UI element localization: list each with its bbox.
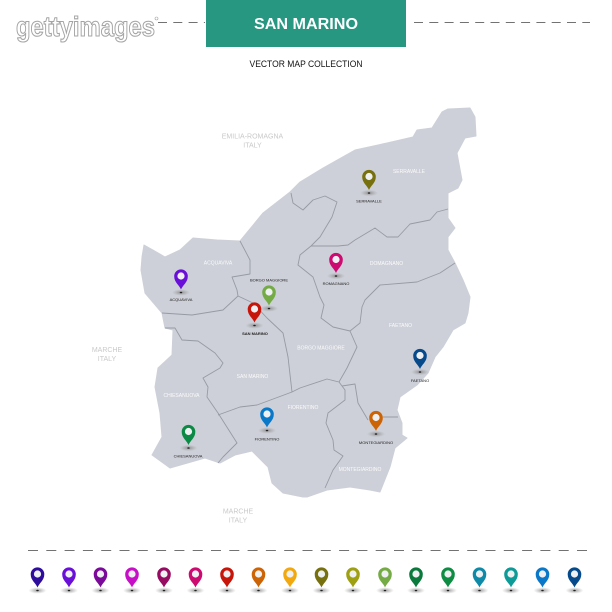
pin labels: ACQUAVIVA — [170, 297, 193, 302]
title banner — [206, 0, 406, 47]
district labels: ACQUAVIVA — [204, 260, 233, 266]
district labels: MONTEGIARDINO — [339, 467, 381, 473]
map outline — [141, 108, 476, 497]
district labels: SERRAVALLE — [393, 169, 426, 175]
pin colour legend row — [28, 567, 584, 594]
pin labels: ROMAGNANO — [323, 281, 349, 286]
pin labels: MONTEGIARDINO — [359, 440, 393, 445]
district labels: CHIESANUOVA — [163, 393, 200, 399]
district labels: DOMAGNANO — [370, 261, 403, 267]
title banner: SAN MARINO — [254, 16, 358, 33]
neighbouring region label: Marche west: MARCHE — [92, 347, 122, 354]
district labels: SAN MARINO — [237, 374, 268, 380]
district labels: FAETANO — [389, 323, 412, 329]
top dashed line left — [158, 22, 205, 24]
watermark: gettyimages — [16, 11, 155, 42]
neighbouring region label: Marche west: ITALY — [98, 356, 117, 363]
pin labels: SAN MARINO — [242, 331, 268, 336]
district labels — [163, 169, 426, 473]
district labels: FIORENTINO — [288, 405, 319, 411]
district labels: BORGO MAGGIORE — [297, 346, 345, 352]
neighbouring region label: Emilia-Romagna: EMILIA-ROMAGNA — [222, 134, 284, 140]
map pins — [172, 170, 429, 451]
district borders — [162, 193, 455, 488]
top dashed line right — [414, 22, 590, 24]
map of San Marino — [141, 108, 476, 497]
neighbouring region label: Marche south: ITALY — [229, 518, 248, 524]
pin labels: BORGO MAGGIORE — [250, 278, 288, 282]
neighbouring region label: Marche south: MARCHE — [223, 508, 253, 516]
neighbouring region label: Emilia-Romagna: ITALY — [243, 142, 262, 150]
bottom dashed line — [28, 550, 588, 552]
subtitle: VECTOR MAP COLLECTION — [250, 59, 362, 69]
pin labels: SERRAVALLE — [356, 198, 382, 204]
pin labels: FAETANO — [411, 378, 429, 383]
pin labels: CHIESANUOVA — [174, 454, 203, 458]
pin labels — [170, 198, 429, 458]
pin labels: FIORENTINO — [255, 436, 279, 442]
